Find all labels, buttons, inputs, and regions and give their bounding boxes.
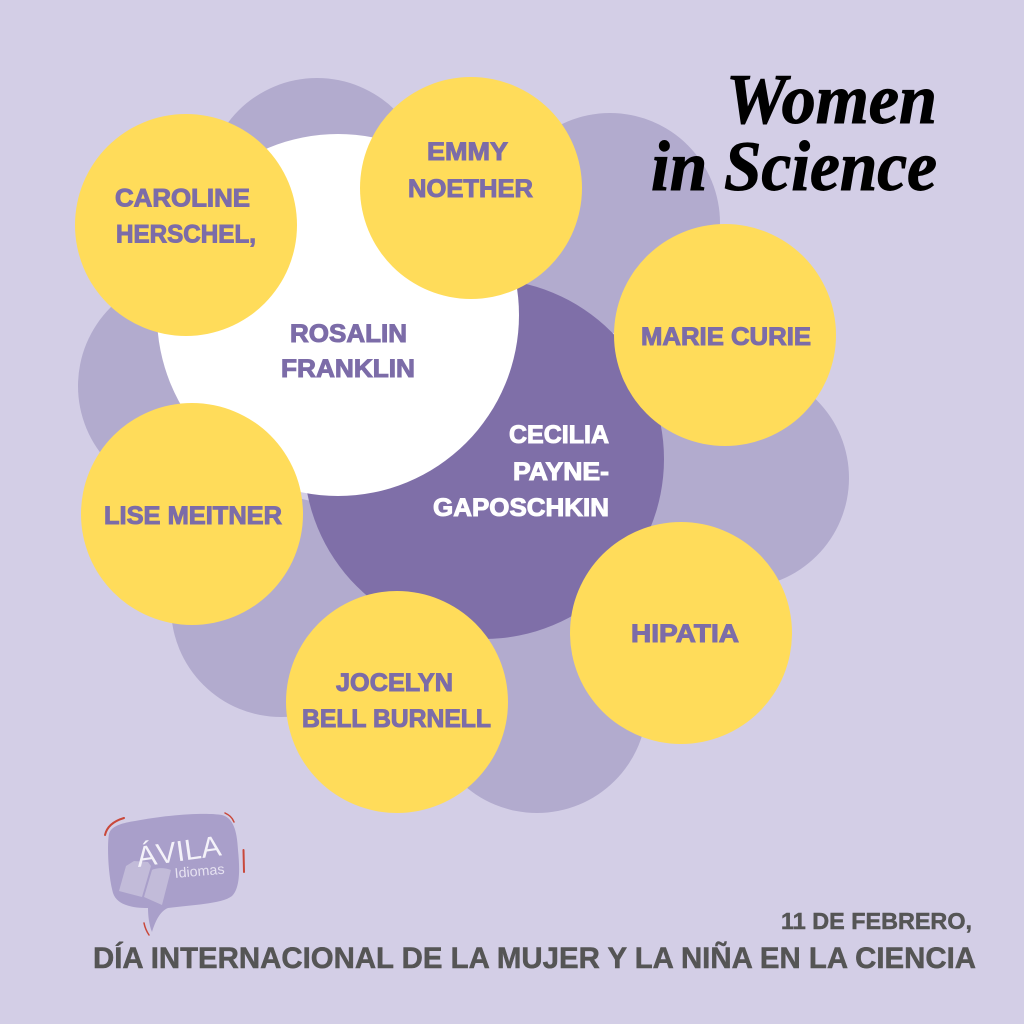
circle: Jocelyn Bell Burnell	[286, 591, 508, 813]
title: Women	[726, 61, 937, 139]
circle: Caroline Herschel	[75, 114, 297, 336]
circle: Lise Meitner	[81, 403, 303, 625]
circle: Rosalin Franklin	[157, 134, 519, 496]
circle: Emmy Noether: EMMY	[427, 138, 508, 166]
logo: Ávila Idiomas speech bubble: Idiomas	[174, 861, 225, 881]
circle: Rosalin Franklin: ROSALIN	[290, 320, 407, 348]
circle: Cecilia Payne-Gaposchkin: GAPOSCHKIN	[433, 494, 609, 522]
circle: Hipatia: HIPATIA	[631, 620, 739, 648]
title: in Science	[651, 128, 937, 206]
footer heading: DÍA INTERNACIONAL DE LA MUJER Y LA NIÑA EN LA CIENCIA	[93, 941, 976, 975]
title	[651, 61, 937, 206]
logo wordmark: ÁVILA	[134, 829, 224, 874]
circle: Rosalin Franklin: FRANKLIN	[281, 355, 415, 383]
logo: Ávila Idiomas speech bubble	[105, 813, 244, 935]
logo book icon	[119, 861, 171, 905]
footer date: 11 DE FEBRERO,	[781, 908, 972, 934]
circle: Cecilia Payne-Gaposchkin	[304, 279, 664, 639]
circle: Hipatia	[570, 522, 792, 744]
circle: Cecilia Payne-Gaposchkin: PAYNE-	[513, 458, 609, 486]
circle: Marie Curie: MARIE CURIE	[641, 323, 811, 351]
circle: Emmy Noether	[360, 77, 582, 299]
circle: Jocelyn Bell Burnell: BELL BURNELL	[302, 705, 491, 733]
circle: Cecilia Payne-Gaposchkin: CECILIA	[509, 421, 609, 449]
circle: Emmy Noether: NOETHER	[408, 175, 533, 203]
circle: Lise Meitner: LISE MEITNER	[104, 502, 282, 530]
circle: Marie Curie	[614, 224, 836, 446]
logo red accent marks	[105, 813, 244, 935]
flower: pale background petals	[78, 78, 849, 813]
circle: Jocelyn Bell Burnell: JOCELYN	[336, 669, 453, 697]
circle: Caroline Herschel: HERSCHEL,	[116, 220, 256, 248]
circle: Caroline Herschel: CAROLINE	[115, 184, 250, 212]
